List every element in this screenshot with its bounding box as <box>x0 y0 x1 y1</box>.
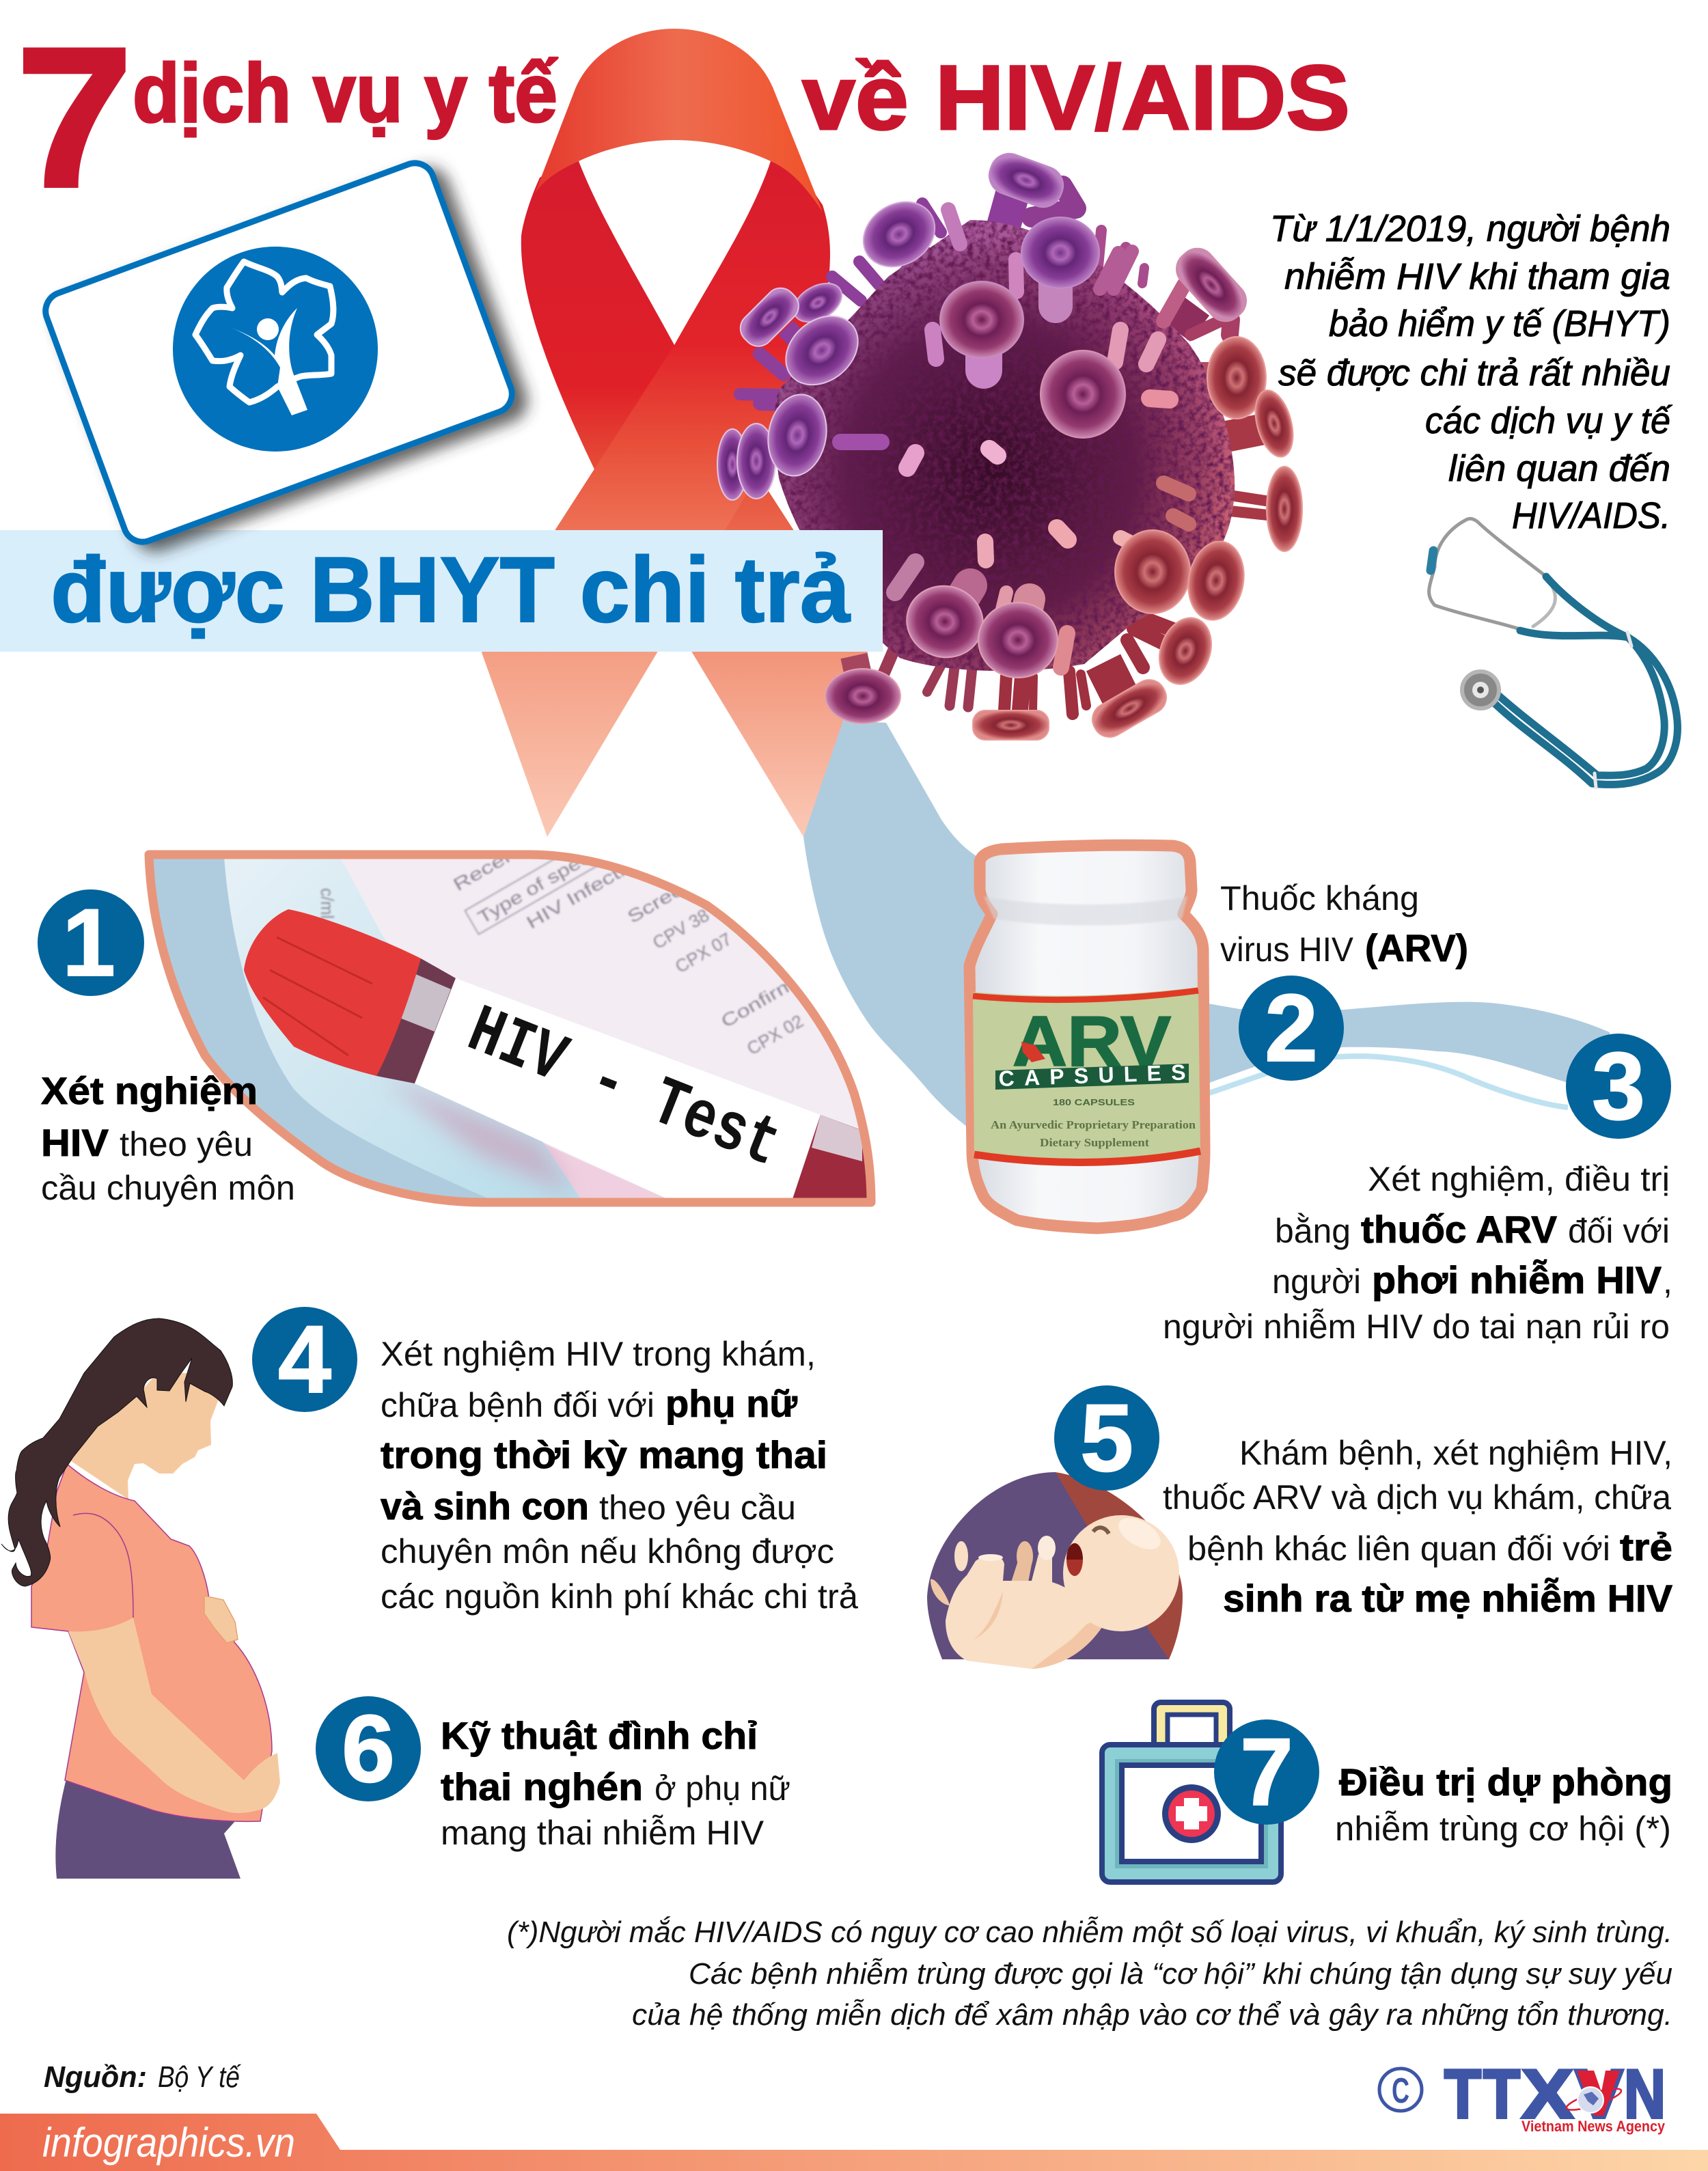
number 1 badge: 1 <box>62 889 115 996</box>
baby head <box>1063 1515 1179 1631</box>
item 3 text: , <box>1663 1262 1672 1301</box>
ARV bottle <box>969 845 1204 1228</box>
number 7 badge <box>1214 1718 1319 1825</box>
blue swoosh connecting items <box>803 721 1619 1148</box>
pants <box>55 1776 240 1879</box>
panel: HIV test photo <box>145 850 876 1206</box>
blood tube <box>376 958 456 1083</box>
subtitle band <box>0 530 883 652</box>
item 3 text: người <box>1272 1262 1361 1301</box>
icon: stethoscope <box>1429 518 1677 788</box>
intro text: nhiễm HIV khi tham gia <box>1284 256 1670 297</box>
ARV bottle: An Ayurvedic Proprietary Preparation <box>991 1118 1196 1131</box>
sleeve line <box>73 1513 133 1618</box>
blurred form text: c/ml <box>317 888 338 919</box>
shirt <box>31 1464 272 1821</box>
baby body <box>946 1554 1097 1669</box>
footnote: (*)Người mắc HIV/AIDS có nguy cơ cao nhiễm một số loại virus, vi khuẩn, ký sinh trùng. <box>507 1916 1672 1949</box>
item 4 text: trong thời kỳ mang thai <box>381 1433 827 1476</box>
virus surface rods <box>840 210 1189 667</box>
TTXVN logo: C <box>1392 2071 1409 2111</box>
intro text <box>1270 208 1673 536</box>
ARV bottle: 180 CAPSULES <box>1053 1097 1135 1107</box>
intro text: liên quan đến <box>1448 448 1670 489</box>
intro text: các dịch vụ y tế <box>1425 400 1673 441</box>
item 3 text: Xét nghiệm, điều trị <box>1368 1160 1670 1198</box>
item 5 text: thuốc ARV và dịch vụ khám, chữa <box>1163 1478 1671 1517</box>
source: Nguồn: <box>44 2060 147 2094</box>
blurred form text: Scree <box>624 879 687 927</box>
footnote: Các bệnh nhiễm trùng được gọi là “cơ hội” khi chúng tận dụng sự suy yếu <box>689 1957 1672 1991</box>
number 2 badge <box>1239 974 1344 1081</box>
item 1 text <box>41 1069 295 1207</box>
item 3 text <box>1163 1160 1672 1346</box>
item 3 text: bằng <box>1275 1212 1351 1250</box>
TTXVN logo: V <box>1575 2056 1623 2133</box>
item 6 text <box>441 1714 790 1852</box>
item 4 text: các nguồn kinh phí khác chi trả <box>381 1577 858 1616</box>
insurance card <box>40 158 517 547</box>
item 1 text: Xét nghiệm <box>41 1069 258 1112</box>
blurred form text: CPX 02 <box>743 1010 807 1059</box>
blurred form text: CPX 07 <box>672 928 735 977</box>
virus illustration <box>717 148 1302 743</box>
number 1 badge <box>38 889 144 996</box>
blurred form text <box>320 859 805 1054</box>
TTXVN logo: N <box>1624 2056 1666 2133</box>
footer bar: infographics.vn <box>42 2120 295 2166</box>
item 3 text: thuốc ARV <box>1361 1208 1557 1251</box>
item 7 text: Điều trị dự phòng <box>1339 1760 1672 1803</box>
number 4 badge: 4 <box>278 1305 331 1413</box>
intro text: bảo hiểm y tế (BHYT) <box>1329 303 1670 344</box>
item 2 text: (ARV) <box>1365 926 1468 969</box>
TTXVN logo: Vietnam News Agency <box>1521 2118 1666 2135</box>
bottle green label <box>973 987 1200 1164</box>
intro text: Từ 1/1/2019, người bệnh <box>1270 208 1670 249</box>
TTXVN logo: T <box>1483 2056 1520 2133</box>
hand <box>204 1596 238 1643</box>
hair <box>1 1318 232 1586</box>
number 6 badge <box>316 1695 421 1802</box>
item 4 text: và sinh con <box>381 1484 589 1527</box>
item 4 text: phụ nữ <box>665 1382 797 1425</box>
item 3 text: người nhiễm HIV do tai nạn rủi ro <box>1163 1308 1670 1346</box>
title: về HIV/AIDS: về HIV/AIDS <box>802 47 1350 149</box>
virus back rods and stems <box>740 186 1274 714</box>
item 4 text: chữa bệnh đối với <box>381 1386 655 1424</box>
item 1 text: HIV <box>41 1121 109 1164</box>
bottle text: ARV <box>1013 1002 1171 1081</box>
number 7 badge: 7 <box>1240 1718 1293 1825</box>
title: dịch vụ y tế: dịch vụ y tế <box>133 46 557 139</box>
TTXVN logo: T <box>1444 2056 1481 2133</box>
item 6 text: Kỹ thuật đình chỉ <box>441 1714 758 1757</box>
subtitle: được BHYT chi trả: được BHYT chi trả <box>51 538 851 641</box>
blurred form text: Type of spec <box>474 847 594 928</box>
item 4 text: theo yêu cầu <box>599 1489 796 1527</box>
number 2 badge: 2 <box>1265 974 1318 1081</box>
item 6 text: thai nghén <box>441 1765 643 1808</box>
item 4 text: chuyên môn nếu không được <box>381 1532 834 1571</box>
tube white label <box>415 978 821 1209</box>
icon: health insurance logo <box>173 247 378 452</box>
item 5 text: sinh ra từ mẹ nhiễm HIV <box>1223 1577 1672 1620</box>
skin <box>70 1373 219 1499</box>
item 6 text: ở phụ nữ <box>655 1769 790 1808</box>
source <box>44 2060 241 2094</box>
number 4 badge <box>252 1305 357 1413</box>
icon: first aid kit <box>1102 1702 1281 1882</box>
item 7 text <box>1335 1760 1672 1848</box>
footer bar <box>0 2114 1708 2171</box>
item 3 text: phơi nhiễm HIV <box>1372 1258 1662 1301</box>
baby illustration <box>927 1472 1183 1669</box>
source: Bộ Y tế <box>158 2060 241 2094</box>
item 5 text: Khám bệnh, xét nghiệm HIV, <box>1239 1434 1672 1472</box>
item 4 text: Xét nghiệm HIV trong khám, <box>381 1335 816 1373</box>
intro text: HIV/AIDS. <box>1512 495 1670 536</box>
blurred form text: Confirm <box>717 973 799 1032</box>
baby limbs <box>1017 1541 1033 1571</box>
footnote: của hệ thống miễn dịch để xâm nhập vào cơ thể và gây ra những tổn thương. <box>632 1998 1672 2032</box>
lower paper <box>545 1144 664 1198</box>
virus mushroom stems on body <box>956 280 1056 622</box>
item 2 text <box>1220 879 1468 969</box>
TTXVN logo <box>1379 2056 1666 2135</box>
number 3 badge: 3 <box>1592 1032 1645 1139</box>
title: number 7: 7 <box>16 7 133 228</box>
intro text: sẽ được chi trả rất nhiều <box>1278 352 1670 393</box>
ARV bottle: CAPSULES <box>998 1060 1186 1091</box>
number 5 badge: 5 <box>1080 1384 1133 1491</box>
blurred form text: HIV Infectio <box>523 854 639 933</box>
footnote <box>507 1916 1672 2032</box>
tube red cap <box>244 909 421 1076</box>
item 3 text: đối với <box>1568 1212 1670 1250</box>
number 3 badge <box>1566 1032 1671 1139</box>
red ribbon <box>482 29 868 837</box>
item 2 text: Thuốc kháng <box>1220 879 1419 917</box>
pregnant woman illustration <box>1 1318 280 1879</box>
item 7 text: nhiễm trùng cơ hội (*) <box>1335 1810 1671 1848</box>
label text: HIV - Test: HIV - Test <box>457 993 790 1185</box>
arm <box>68 1618 280 1813</box>
blurred form text: Recei <box>450 846 513 895</box>
virus spike heads <box>717 148 1302 743</box>
blurred form text: CPV 38 <box>649 904 713 953</box>
number 6 badge: 6 <box>342 1695 395 1802</box>
item 5 text: bệnh khác liên quan đối với <box>1187 1530 1610 1568</box>
ARV bottle: Dietary Supplement <box>1040 1136 1149 1149</box>
TTXVN logo: X <box>1521 2056 1573 2133</box>
item 6 text: mang thai nhiễm HIV <box>441 1814 765 1852</box>
item 5 text <box>1163 1434 1672 1620</box>
item 1 text: cầu chuyên môn <box>41 1169 295 1207</box>
number 5 badge <box>1054 1384 1159 1491</box>
baby mouth and eye <box>1066 1543 1083 1576</box>
item 2 text: virus HIV <box>1220 930 1354 969</box>
item 1 text: theo yêu <box>120 1125 253 1163</box>
item 4 text <box>381 1335 858 1616</box>
item 5 text: trẻ <box>1620 1525 1672 1568</box>
virus body <box>775 220 1235 671</box>
